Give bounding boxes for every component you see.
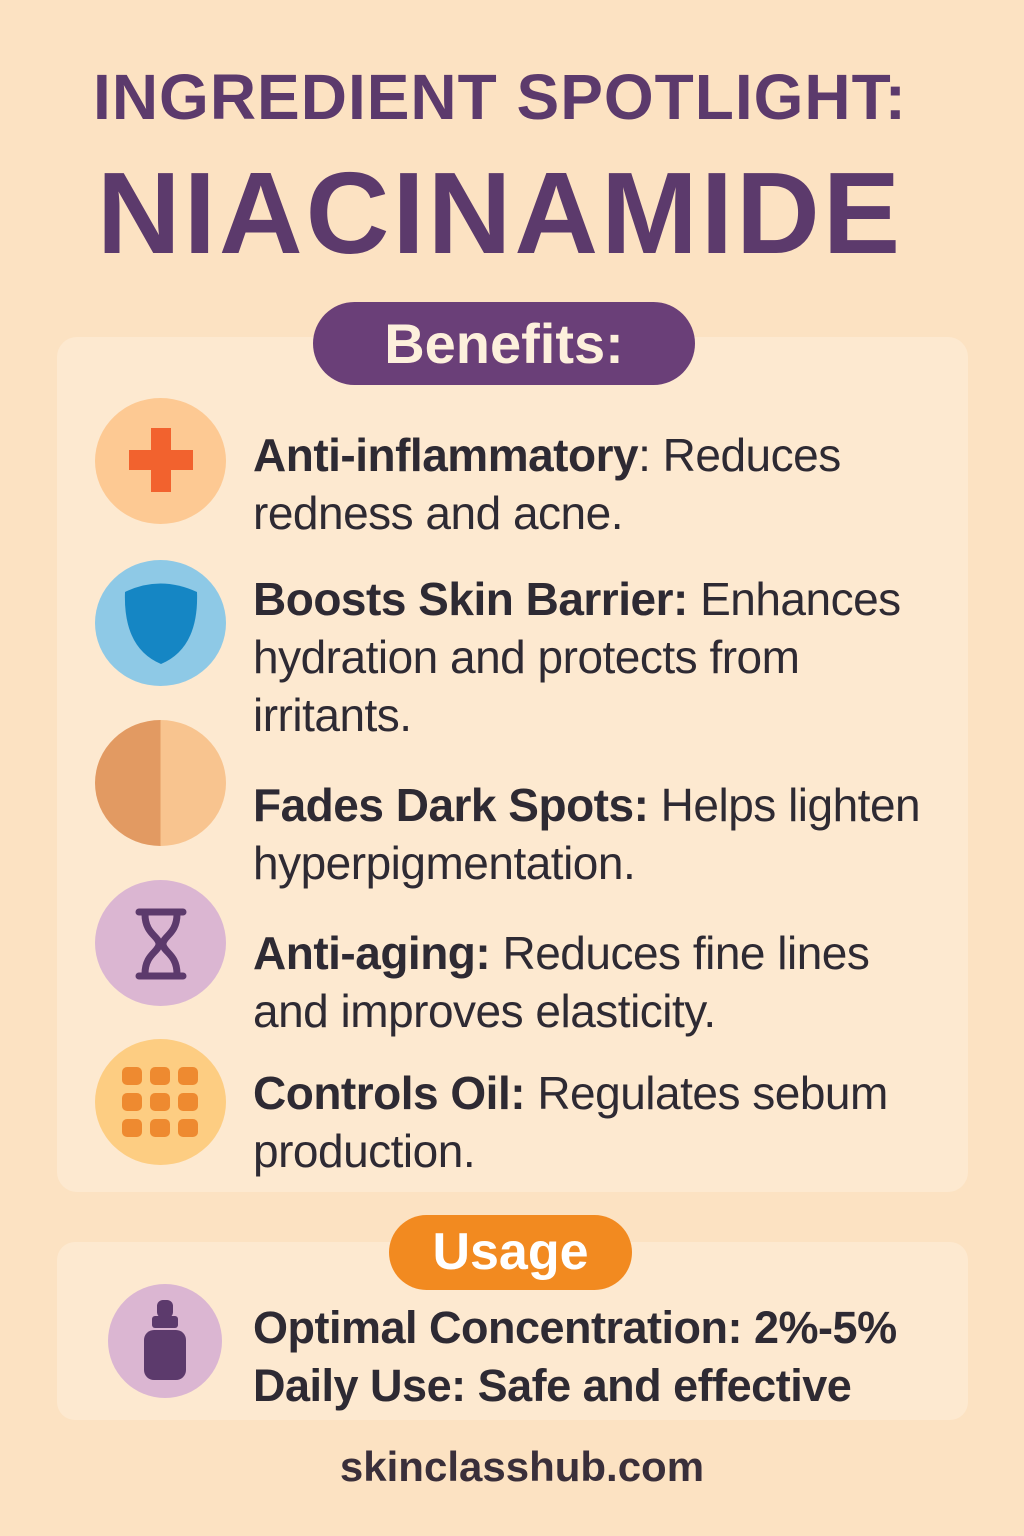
benefits pill: Benefits: xyxy=(384,312,624,375)
title line 2: NIACINAMIDE xyxy=(97,148,903,278)
benefits pill xyxy=(313,302,695,385)
usage text xyxy=(253,1302,897,1411)
icon: half circle xyxy=(95,720,226,846)
usage text: Daily Use: Safe and effective xyxy=(253,1360,851,1411)
text: dark spots: hyperpigmentation. xyxy=(253,837,635,889)
icon: dropper bottle xyxy=(108,1284,222,1398)
icon: cross xyxy=(95,398,226,524)
text: dark spots xyxy=(253,779,920,889)
title line 1: INGREDIENT SPOTLIGHT: xyxy=(93,61,907,133)
text: anti-inflammatory: Anti-inflammatory: Reduces xyxy=(253,429,841,481)
text: controls oil: production. xyxy=(253,1125,475,1177)
text: skin barrier xyxy=(253,573,901,741)
text: controls oil xyxy=(253,1067,888,1177)
text: dark spots: Fades Dark Spots: Helps lighten xyxy=(253,779,920,831)
text: anti-aging: Anti-aging: Reduces fine lines xyxy=(253,927,869,979)
text: controls oil: Controls Oil: Regulates sebum xyxy=(253,1067,888,1119)
text: anti-inflammatory: redness and acne. xyxy=(253,487,623,539)
usage text: Optimal Concentration: 2%-5% xyxy=(253,1302,897,1353)
usage pill xyxy=(389,1215,632,1290)
icon: hourglass xyxy=(95,880,226,1006)
footer url: skinclasshub.com xyxy=(340,1443,704,1490)
usage pill: Usage xyxy=(432,1223,589,1281)
text: skin barrier: hydration and protects from xyxy=(253,631,799,683)
panel: usage xyxy=(57,1242,968,1420)
text: anti-inflammatory xyxy=(253,429,841,539)
icon: oil grid xyxy=(95,1039,226,1165)
panel: benefits xyxy=(57,337,968,1192)
text: anti-aging xyxy=(253,927,869,1037)
text: anti-aging: and improves elasticity. xyxy=(253,985,716,1037)
icon: shield xyxy=(95,560,226,686)
text: skin barrier: irritants. xyxy=(253,689,412,741)
text: skin barrier: Boosts Skin Barrier: Enhances xyxy=(253,573,901,625)
